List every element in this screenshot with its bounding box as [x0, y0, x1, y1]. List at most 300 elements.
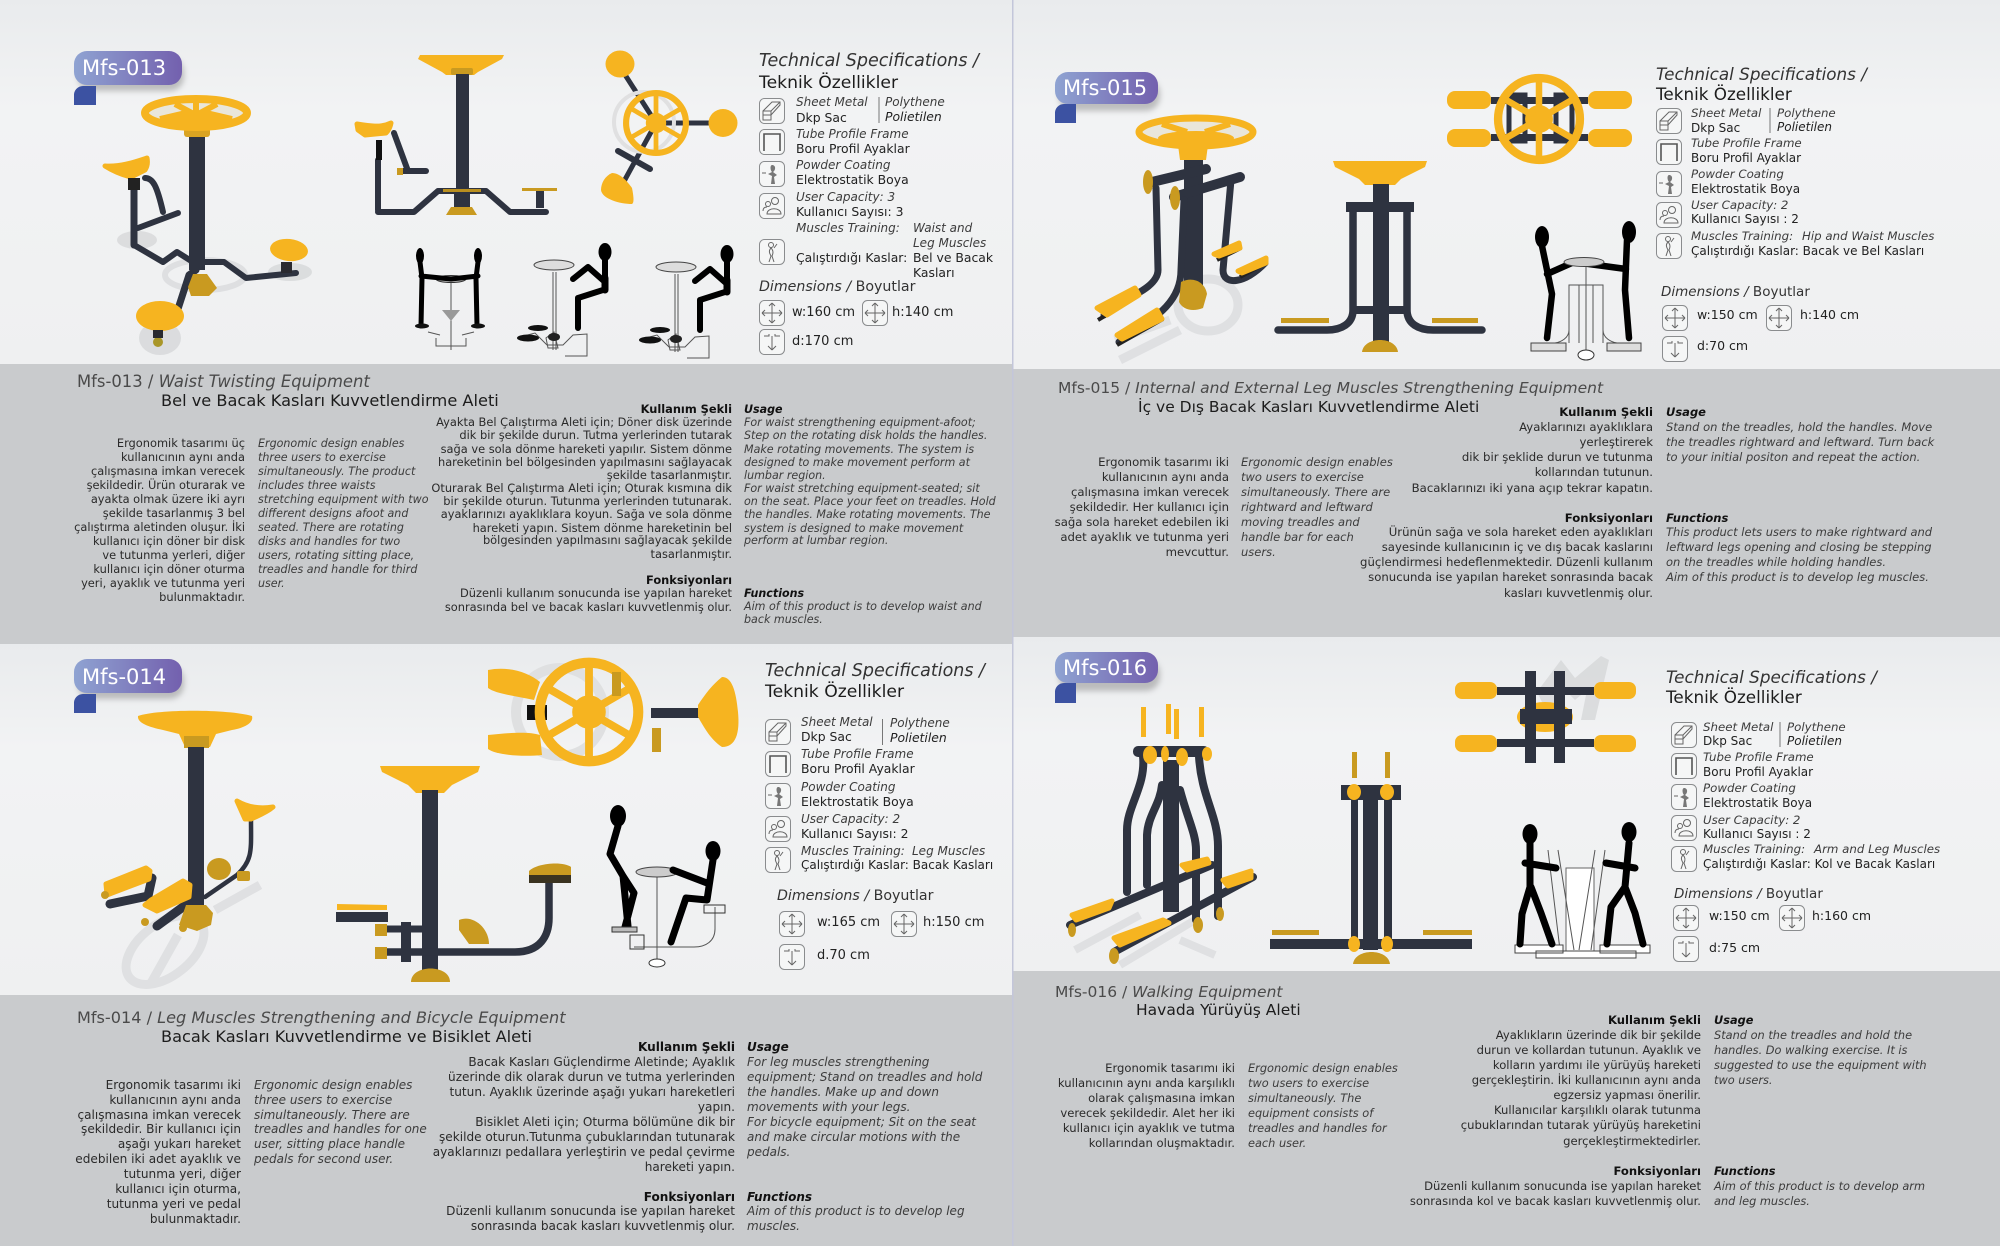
functions English: Functions [744, 587, 805, 600]
spec heading: Technical Specifications / [765, 661, 987, 681]
dimensions: h:140 cm [1800, 307, 1859, 322]
spec: user capacity: Kullanıcı Sayısı: 2 [801, 826, 908, 841]
spec: tube frame: Tube Profile Frame [796, 127, 909, 141]
spec: sheet metal: Polythene [1777, 106, 1836, 120]
usage Turkish: Bisiklet Aleti için; Oturma bölümüne dik bir [475, 1115, 735, 1129]
badge: Mfs-014: Mfs-014 [82, 665, 166, 689]
spec: muscles training: Bel ve Bacak [913, 250, 994, 265]
spec: user capacity: User Capacity: 2 [801, 812, 900, 826]
spec: sheet metal: Dkp Sac [801, 729, 852, 744]
spec: user capacity: Kullanıcı Sayısı: 3 [796, 204, 903, 219]
functions Turkish: sonrasında bacak kasları kuvvetlenmiş olur. [471, 1219, 735, 1233]
spec: powder coating [1672, 781, 1812, 810]
title: Walking Equipment [1132, 983, 1283, 1001]
usage Turkish: hareketi yapın. Sistem dönme hareketinin bel [473, 521, 732, 535]
spec: user capacity: User Capacity: 2 [1691, 198, 1788, 212]
usage English: Make rotating movements. The system is [744, 443, 974, 456]
intro English: Ergonomic design enables [258, 437, 405, 450]
spec: sheet metal: Sheet Metal [1703, 720, 1774, 734]
spec: powder coating: Elektrostatik Boya [1703, 796, 1812, 810]
functions English: This product lets users to make rightward and [1666, 525, 1933, 539]
functions English: and leg muscles. [1714, 1194, 1810, 1208]
usage English: Usage [1714, 1013, 1754, 1027]
badge: Mfs-014 [74, 659, 184, 713]
title: Mfs-014 / [77, 1008, 157, 1027]
dimensions [1661, 284, 1859, 362]
spec heading: Technical Specifications / [1666, 667, 1879, 687]
usage Turkish: ayaklarınızı ayaklıklara koyun. Sağa ve sola dönme [441, 507, 732, 521]
intro English: stretching equipment with two [258, 493, 429, 506]
panel: Mfs-014 description band [0, 995, 1013, 1246]
spec: muscles training: Çalıştırdığı Kaslar: Kol ve Bacak Kasları [1703, 857, 1935, 871]
spec: sheet metal: Dkp Sac [1691, 121, 1740, 135]
functions Turkish: Fonksiyonları [646, 573, 732, 587]
spec: sheet metal: Polythene [885, 95, 945, 109]
intro Turkish: şekildedir. Her kullanıcı için [1070, 500, 1229, 514]
panel: Mfs-013 product area [0, 0, 1013, 364]
intro English: treadles and handles for [1248, 1121, 1388, 1135]
dimensions: w:165 cm [817, 915, 880, 930]
dimensions: Dimensions / [759, 279, 853, 295]
spec: user capacity: Kullanıcı Sayısı : 2 [1703, 827, 1811, 841]
spec: sheet metal: Sheet Metal [796, 95, 868, 109]
spec: muscles training: Muscles Training: [1691, 229, 1793, 243]
usage Turkish: sağa ve sola dönme hareketi yapılır. Sistem dönme [441, 442, 732, 456]
functions English: leftward legs opening and closing be stepping [1666, 540, 1932, 554]
equipment 3D view: Mfs-013 [105, 99, 312, 355]
spec: tube frame: Boru Profil Ayaklar [1703, 765, 1813, 779]
usage English: movements with your legs. [747, 1100, 910, 1114]
spec heading: Teknik Özellikler [1655, 83, 1792, 104]
spec: sheet metal: Polythene [890, 716, 950, 730]
spec: muscles training [760, 221, 994, 280]
intro Turkish: olarak çalışmasına imkan [1088, 1091, 1235, 1105]
functions English: Aim of this product is to develop leg [746, 1204, 965, 1218]
intro Turkish: şekilde tasarlanmış 3 bel [103, 506, 245, 520]
dimensions: h:160 cm [1812, 908, 1871, 923]
spec: sheet metal: Dkp Sac [1703, 734, 1752, 748]
usage English: system is designed to make movement [744, 522, 964, 535]
functions Turkish: Fonksiyonları [644, 1190, 735, 1204]
spec: tube frame: Boru Profil Ayaklar [1691, 151, 1801, 165]
panel: Mfs-013 description band [0, 364, 1013, 644]
intro English: treadles and handles for one [254, 1122, 427, 1136]
dimensions: Boyutlar [851, 279, 916, 295]
title: Leg Muscles Strengthening and Bicycle Equipment [157, 1008, 566, 1027]
dimensions: d:70 cm [1697, 338, 1748, 353]
dimensions: Boyutlar [1762, 886, 1823, 902]
dimensions: w:150 cm [1697, 307, 1758, 322]
dimensions: Dimensions / [1674, 886, 1763, 902]
functions Turkish: Fonksiyonları [1565, 511, 1653, 525]
spec: tube frame: Tube Profile Frame [1703, 750, 1814, 764]
dimensions: Boyutlar [869, 888, 934, 904]
intro English: disks and handles for two [258, 535, 400, 548]
intro English: Ergonomic design enables [1248, 1061, 1398, 1075]
usage Turkish: çubuklarından tutarak yürüyüş hareketini [1461, 1118, 1701, 1132]
spec: powder coating: Powder Coating [1691, 167, 1784, 181]
intro Turkish: yeri, ayaklık ve tutunma yeri [81, 576, 245, 590]
usage English: two users. [1714, 1073, 1773, 1087]
intro Turkish: şekildedir. Bir kullanıcı için [81, 1122, 241, 1136]
usage Turkish: hareketi yapın. [645, 1160, 735, 1174]
title: Waist Twisting Equipment [159, 372, 370, 391]
functions Turkish: sonucunda ise yapılan hareket sonrasında bacak [1368, 570, 1653, 584]
spec: tube frame: Boru Profil Ayaklar [801, 761, 916, 776]
badge: Mfs-016 [1055, 652, 1160, 703]
spec: muscles training: Çalıştırdığı Kaslar: Bacak ve Bel Kasları [1691, 244, 1924, 258]
spec: user capacity [1656, 198, 1799, 228]
usage English: For leg muscles strengthening [747, 1055, 930, 1069]
usage Turkish: durun ve kollardan tutunun. Ayaklık ve [1477, 1043, 1701, 1057]
functions English: on the treadles while holding handles. [1666, 555, 1886, 569]
title: Havada Yürüyüş Aleti [1136, 1001, 1301, 1019]
intro English: each user. [1248, 1136, 1306, 1150]
intro Turkish: kullanıcının aynı anda [1102, 470, 1229, 484]
usage Turkish: gerçekleştirin. İki kullanıcının aynı anda [1472, 1072, 1701, 1087]
spec: muscles training: Muscles Training: [801, 844, 905, 858]
specifications: Mfs-016 [1665, 667, 1940, 962]
intro Turkish: kullanıcı için oturma, [115, 1182, 241, 1196]
functions Turkish: Ürünün sağa ve sola hareket eden ayaklıkları [1389, 523, 1653, 539]
intro English: users, rotating sitting place, [258, 549, 414, 562]
equipment 3D view: Mfs-016 [1068, 704, 1253, 965]
spec: muscles training: Hip and Waist Muscles [1802, 229, 1934, 243]
spec: tube frame: Boru Profil Ayaklar [796, 141, 911, 156]
spec: muscles training: Çalıştırdığı Kaslar: Bacak Kasları [801, 858, 993, 872]
equipment front view: Mfs-016 [1270, 752, 1472, 964]
spec: sheet metal: Sheet Metal [1691, 106, 1762, 120]
spec: powder coating [760, 158, 909, 187]
intro English: handle bar for each [1241, 530, 1354, 544]
spec: powder coating: Elektrostatik Boya [1691, 182, 1800, 196]
badge: Mfs-013 [74, 51, 184, 105]
title: Bel ve Bacak Kasları Kuvvetlendirme Aleti [161, 391, 499, 410]
spec: sheet metal: Polietilen [1787, 734, 1842, 748]
intro Turkish: adet ayaklık ve tutunma yeri [1060, 530, 1229, 544]
description: Mfs-015 [1055, 379, 1936, 600]
functions English: Functions [747, 1190, 812, 1204]
functions English: Aim of this product is to develop arm [1713, 1179, 1925, 1193]
dimensions: Dimensions / [777, 888, 871, 904]
intro Turkish: mevcuttur. [1166, 545, 1229, 559]
spec: muscles training: Leg Muscles [912, 844, 985, 858]
intro English: pedals for second user. [253, 1152, 393, 1166]
panel: Mfs-016 product area [1013, 637, 2000, 971]
stick figure side views: Mfs-013 [517, 243, 734, 358]
functions English: back muscles. [744, 613, 823, 626]
usage English: Usage [1666, 405, 1706, 419]
spec heading: Technical Specifications / [759, 51, 981, 71]
equipment 3D view: Mfs-015 [1097, 118, 1266, 360]
usage English: For waist strengthening equipment-afoot; [744, 416, 976, 429]
usage Turkish: bir şekilde oturun. Tutunma yerlerinden tutunarak. [443, 494, 732, 508]
functions English: Aim of this product is to develop waist and [743, 600, 983, 613]
spec heading: Teknik Özellikler [1665, 686, 1802, 707]
usage Turkish: Ayakta Bel Çalıştırma Aleti için; Döner disk üzerinde [436, 415, 732, 429]
dimensions: d:75 cm [1709, 940, 1760, 955]
dimensions: Dimensions / [1661, 284, 1750, 300]
usage English: Stand on the treadles and hold the [1714, 1028, 1912, 1042]
functions Turkish: sonrasında bel ve bacak kasları kuvvetlenmiş olur. [445, 600, 732, 614]
equipment front view: Mfs-015 [1278, 161, 1482, 352]
intro Turkish: kullanıcı için döner bir disk [93, 534, 245, 548]
spec: user capacity [766, 812, 908, 842]
spec: tube frame [1672, 750, 1814, 779]
title: Mfs-016 / [1055, 983, 1132, 1001]
equipment top view: Mfs-014 [488, 663, 738, 761]
intro Turkish: bulunmaktadır. [150, 1212, 241, 1226]
dimensions: d:170 cm [792, 334, 853, 349]
intro Turkish: ve tutunma yerleri, diğer [102, 548, 245, 562]
usage Turkish: Oturarak Bel Çalıştırma Aleti için; Oturak kısmına dik [431, 481, 732, 495]
usage Turkish: Bacak Kasları Güçlendirme Aletinde; Ayaklık [468, 1055, 735, 1069]
intro Turkish: çalışmasına imkan verecek [1071, 485, 1229, 499]
usage Turkish: tasarlanmıştır. [650, 547, 732, 561]
intro English: three users to exercise [258, 451, 386, 464]
intro English: Ergonomic design enables [1241, 455, 1393, 469]
title: Mfs-015 / [1058, 379, 1135, 397]
spec: tube frame [760, 127, 911, 156]
functions Turkish: kasları kuvvetlenmiş olur. [1504, 586, 1653, 600]
intro Turkish: Ergonomik tasarımı üç [117, 436, 245, 450]
usage Turkish: şekilde oturun.Tutunma çubuklarından tutunarak [439, 1130, 735, 1144]
intro English: different designs afoot and [258, 507, 409, 520]
spec: sheet metal [1672, 720, 1846, 748]
panel: Mfs-016 description band [1013, 971, 2000, 1246]
intro English: two users to exercise [1241, 470, 1364, 484]
usage English: to your initial positon and repeat the action. [1666, 450, 1920, 464]
usage Turkish: Kullanım Şekli [641, 402, 732, 416]
intro English: Ergonomic design enables [254, 1078, 412, 1092]
spec: muscles training: Kasları [913, 265, 955, 280]
usage English: For bicycle equipment; Sit on the seat [747, 1115, 977, 1129]
intro Turkish: ayakta olmak üzere iki ayrı [91, 492, 245, 506]
intro Turkish: tutunma yeri, diğer [124, 1167, 241, 1181]
usage Turkish: hareketinin bel bölgesinden yapılmasını sağlayacak [438, 455, 732, 469]
spec: tube frame [766, 747, 916, 776]
spec: sheet metal: Polietilen [885, 109, 942, 124]
usage Turkish: gerçekleştirmektedirler. [1563, 1134, 1701, 1148]
stick figure front view: Mfs-013 [415, 248, 485, 350]
functions Turkish: Düzenli kullanım sonucunda ise yapılan hareket [460, 586, 733, 600]
intro English: includes three waists [258, 479, 376, 492]
intro Turkish: kullanıcı için döner oturma [93, 562, 245, 576]
intro Turkish: kollarından oluşmaktadır. [1089, 1136, 1235, 1150]
intro Turkish: çalışmasına imkan verecek [77, 1108, 241, 1122]
intro Turkish: Ergonomik tasarımı iki [106, 1078, 241, 1092]
usage Turkish: üzerinde dik olarak durun ve tutma yerlerinden [448, 1070, 735, 1084]
spec heading: Technical Specifications / [1656, 64, 1869, 84]
usage English: Step on the rotating disk holds the handles. [744, 429, 987, 442]
equipment front view: Mfs-014 [336, 766, 571, 982]
usage English: the treadles rightward and leftward. Turn back [1666, 435, 1936, 449]
usage English: Usage [747, 1040, 789, 1054]
equipment top view: Mfs-015 [1447, 78, 1632, 160]
spec: powder coating: Powder Coating [1703, 781, 1796, 795]
dimensions [759, 279, 953, 354]
spec: muscles training: Arm and Leg Muscles [1813, 842, 1940, 856]
badge: Mfs-016: Mfs-016 [1063, 656, 1147, 680]
spec: tube frame: Tube Profile Frame [801, 747, 914, 761]
usage Turkish: tutun. Ayaklık üzerinde aşağı yukarı hareketleri [450, 1085, 735, 1099]
title: Bacak Kasları Kuvvetlendirme ve Bisiklet Aleti [161, 1027, 532, 1046]
stick figures: Mfs-015 [1531, 221, 1641, 360]
usage English: suggested to use the equipment with [1714, 1058, 1927, 1072]
intro English: simultaneously. The product [258, 465, 416, 478]
intro English: rightward and leftward [1241, 500, 1373, 514]
equipment top view: Mfs-013 [601, 50, 738, 204]
description: Mfs-014 [75, 1008, 983, 1233]
spec: user capacity: Kullanıcı Sayısı : 2 [1691, 212, 1799, 226]
dimensions: d.70 cm [817, 948, 870, 963]
functions Turkish: Düzenli kullanım sonucunda ise yapılan hareket [1424, 1179, 1701, 1193]
usage Turkish: yapın. [698, 1100, 735, 1114]
intro English: three users to exercise [254, 1093, 392, 1107]
usage Turkish: egzersiz yapması önerilir. [1553, 1088, 1701, 1102]
dimensions: w:160 cm [792, 305, 855, 320]
specifications: Mfs-013 [758, 51, 994, 354]
functions English: Aim of this product is to develop leg muscles. [1665, 570, 1929, 584]
functions Turkish: Düzenli kullanım sonucunda ise yapılan hareket [446, 1204, 735, 1218]
equipment front view: Mfs-013 [357, 55, 557, 215]
intro English: equipment consists of [1248, 1106, 1375, 1120]
intro Turkish: bulunmaktadır. [159, 590, 245, 604]
usage English: on the seat. Place your feet on treadles. Hold [744, 495, 997, 508]
spec: sheet metal: Dkp Sac [796, 110, 847, 125]
usage English: For waist stretching equipment-seated; sit [744, 482, 980, 495]
functions English: Functions [1714, 1164, 1776, 1178]
spec: muscles training: Muscles Training: [1703, 842, 1805, 856]
usage Turkish: yerleştirerek [1579, 435, 1653, 449]
usage Turkish: Kullanıcılar karşılıklı olarak tutunma [1494, 1103, 1701, 1117]
usage English: handles. Do walking exercise. It is [1714, 1043, 1908, 1057]
dimensions [777, 888, 984, 970]
spec: muscles training: Leg Muscles [913, 236, 986, 250]
intro English: user, sitting place handle [254, 1137, 405, 1151]
intro English: users. [1241, 545, 1276, 559]
usage Turkish: Ayaklarınızı ayaklıklara [1519, 420, 1653, 434]
spec: powder coating [1656, 167, 1800, 196]
usage English: and make circular motions with the [747, 1130, 960, 1144]
usage Turkish: Bacaklarınızı iki yana açıp tekrar kapatın. [1412, 481, 1653, 495]
spec: tube frame [1656, 136, 1802, 165]
usage Turkish: Kullanım Şekli [638, 1040, 735, 1054]
intro Turkish: kullanıcının aynı anda [121, 450, 245, 464]
description: Mfs-016 [1055, 983, 1927, 1208]
specifications: Mfs-014 [764, 661, 993, 970]
usage Turkish: dik bir şeklide durun ve tutunma [1462, 450, 1653, 464]
intro Turkish: kullanıcının aynı anda karşılıklı [1058, 1076, 1235, 1090]
spec heading: Teknik Özellikler [764, 680, 905, 702]
usage Turkish: kolların yardımı ile yürüyüş hareketi [1493, 1058, 1701, 1072]
dimensions: h:150 cm [923, 915, 984, 930]
intro Turkish: sağa sola hareket edebilen iki [1055, 515, 1229, 529]
badge: Mfs-013: Mfs-013 [82, 56, 166, 80]
spec: user capacity: User Capacity: 3 [796, 190, 895, 204]
spec: sheet metal [1656, 106, 1836, 135]
spec: muscles training: Muscles Training: [796, 221, 900, 235]
spec: powder coating: Powder Coating [796, 158, 891, 172]
functions English: Functions [1666, 511, 1728, 525]
intro Turkish: şekildedir. Ürün oturarak ve [87, 476, 245, 492]
intro English: moving treadles and [1241, 515, 1360, 529]
intro Turkish: çalıştırma aletinden oluşur. İki [74, 519, 245, 534]
spec: sheet metal [766, 715, 950, 745]
spec: muscles training [1672, 842, 1940, 872]
usage Turkish: dik bir şekilde durun. Tutma yerlerinden tutarak [459, 428, 732, 442]
functions English: muscles. [747, 1219, 800, 1233]
stick figures: Mfs-016 [1515, 822, 1650, 958]
intro Turkish: tutunma yeri ve pedal [107, 1197, 241, 1211]
intro English: treadles and handle for third [258, 563, 418, 576]
intro English: simultaneously. There are [1241, 485, 1390, 499]
intro English: simultaneously. There are [254, 1108, 410, 1122]
specifications: Mfs-015 [1655, 64, 1934, 362]
intro Turkish: Ergonomik tasarımı iki [1105, 1061, 1235, 1075]
intro English: simultaneously. The [1248, 1091, 1361, 1105]
dimensions [1674, 886, 1871, 962]
panel: Mfs-015 description band [1013, 369, 2000, 637]
spec: user capacity: User Capacity: 2 [1703, 813, 1800, 827]
spec: sheet metal: Polietilen [1777, 120, 1832, 134]
stick figures: Mfs-014 [610, 805, 725, 967]
equipment top view: Mfs-016 [1455, 656, 1636, 763]
intro English: user. [258, 577, 285, 590]
usage Turkish: bölgesinden yapılmasını sağlayacak şekilde [483, 533, 732, 547]
functions Turkish: güçlendirmesi hedeflenmektedir. Düzenli kullanım [1360, 555, 1653, 569]
usage Turkish: Kullanım Şekli [1559, 405, 1653, 419]
intro Turkish: kullanıcı için ayaklık ve tutma [1063, 1121, 1235, 1135]
panel: Mfs-014 product area [0, 644, 1013, 995]
usage English: lumbar region. [744, 469, 826, 482]
spec: muscles training [1656, 229, 1934, 258]
spec: muscles training: Waist and [913, 221, 973, 235]
intro Turkish: edebilen iki adet ayaklık ve [75, 1152, 241, 1166]
intro Turkish: kullanıcının aynı anda [109, 1093, 241, 1107]
badge: Mfs-015 [1055, 72, 1160, 123]
intro English: seated. There are rotating [258, 521, 404, 534]
usage English: pedals. [746, 1145, 790, 1159]
panel: Mfs-015 product area [1013, 0, 2000, 369]
spec: powder coating: Powder Coating [801, 780, 896, 794]
title: Mfs-013 / [77, 372, 159, 391]
spec: user capacity [760, 190, 903, 219]
title: İç ve Dış Bacak Kasları Kuvvetlendirme Aleti [1138, 397, 1479, 416]
spec: powder coating [766, 780, 914, 809]
usage English: equipment; Stand on treadles and hold [747, 1070, 983, 1084]
usage English: perform at lumbar region. [743, 534, 888, 547]
spec heading: Teknik Özellikler [758, 71, 899, 93]
spec: user capacity [1672, 813, 1811, 841]
usage Turkish: Ayaklıkların üzerinde dik bir şekilde [1496, 1028, 1701, 1042]
intro Turkish: verecek şekildedir. Alet her iki [1060, 1106, 1235, 1120]
functions Turkish: sonrasında kol ve bacak kasları kuvvetlenmiş olur. [1410, 1194, 1701, 1208]
usage English: the handles. Make rotating movements. The [744, 508, 991, 521]
spec: sheet metal [760, 95, 945, 125]
usage English: Stand on the treadles, hold the handles. Move [1666, 420, 1932, 434]
spec: muscles training: Çalıştırdığı Kaslar: [796, 250, 907, 265]
functions Turkish: Fonksiyonları [1613, 1164, 1701, 1178]
functions Turkish: sayesinde kullanıcının iç ve dış bacak kaslarını [1382, 540, 1653, 554]
title: Internal and External Leg Muscles Strengthening Equipment [1135, 379, 1604, 397]
spec: sheet metal: Polietilen [890, 730, 947, 745]
spec: tube frame: Tube Profile Frame [1691, 136, 1802, 150]
equipment 3D view: Mfs-014 [101, 711, 273, 998]
spec: powder coating: Elektrostatik Boya [796, 172, 909, 187]
dimensions: w:150 cm [1709, 908, 1770, 923]
dimensions: h:140 cm [892, 305, 953, 320]
